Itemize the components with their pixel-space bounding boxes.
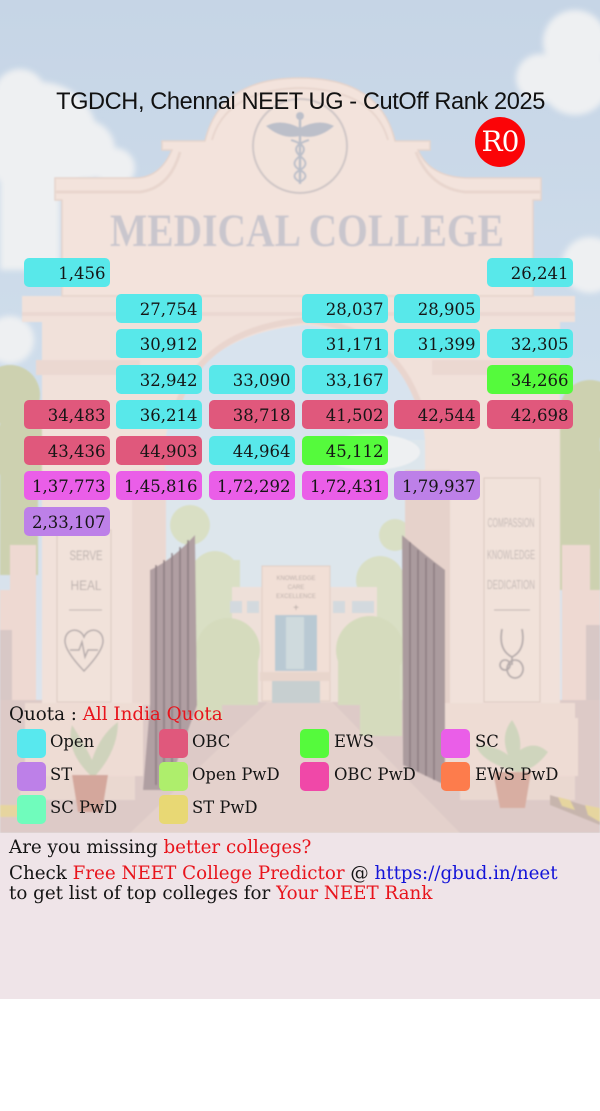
far building: KNOWLEDGE <box>276 576 316 582</box>
rank cell <box>116 400 202 429</box>
rank cell: 2,33,107 <box>32 513 106 532</box>
legend swatch: ST PwD <box>159 795 188 824</box>
rank cell: 30,912 <box>140 335 198 354</box>
rank cell: 1,37,773 <box>32 477 106 496</box>
legend swatch: EWS PwD <box>441 762 470 791</box>
legend swatch: ST <box>17 762 46 791</box>
rank cell <box>209 471 294 500</box>
rank cell <box>24 258 110 287</box>
rank cell <box>24 507 110 536</box>
near trees and bushes <box>196 616 404 736</box>
legend label: OBC: OBC <box>192 732 230 751</box>
legend swatch: OBC <box>159 729 188 758</box>
rank cell: 1,456 <box>58 264 106 283</box>
rank cell <box>487 400 572 429</box>
promo rank line: to get list of top colleges for Your NEET Rank <box>9 883 432 904</box>
rank cell: 42,698 <box>511 406 568 425</box>
left pillar panel: HEAL <box>70 577 102 593</box>
rank cell: 44,903 <box>140 442 198 461</box>
rank cell: 43,436 <box>48 442 106 461</box>
far building: EXCELLENCE <box>276 594 316 600</box>
rank cell <box>302 329 388 358</box>
rank cell <box>24 436 110 465</box>
rank cell <box>394 400 480 429</box>
rank cell <box>116 436 202 465</box>
rank cell: 1,45,816 <box>124 477 198 496</box>
rank cell <box>487 329 572 358</box>
rank cell: 1,72,431 <box>310 477 384 496</box>
rank cell <box>487 365 572 394</box>
legend label: Open: Open <box>50 732 94 751</box>
rank cell: 45,112 <box>326 442 384 461</box>
rank cell <box>24 400 110 429</box>
promo link line: Check Free NEET College Predictor @ https://gbud.in/neet <box>9 863 558 884</box>
rank cell <box>24 471 110 500</box>
legend label: EWS: EWS <box>334 732 374 751</box>
title: TGDCH, Chennai NEET UG - CutOff Rank 2025 <box>56 89 545 115</box>
right pillar panel: KNOWLEDGE <box>487 547 535 562</box>
rank cell <box>116 329 202 358</box>
rank cell <box>116 471 202 500</box>
background illustration: medical college gate <box>0 0 600 833</box>
legend label: SC: SC <box>475 732 499 751</box>
rank cell <box>116 294 202 323</box>
round badge: R0 <box>475 117 525 167</box>
rank cell <box>116 365 202 394</box>
base steps <box>20 703 578 800</box>
rank cell <box>209 365 294 394</box>
rank cell <box>302 471 388 500</box>
rank cell <box>302 294 388 323</box>
rank cell: 32,305 <box>511 335 568 354</box>
promo question: Are you missing better colleges? <box>9 837 311 858</box>
rank cell: 31,399 <box>418 335 476 354</box>
legend label: ST PwD: ST PwD <box>192 798 258 817</box>
legend swatch: SC <box>441 729 470 758</box>
potted plants <box>70 720 548 812</box>
rank cell: 28,037 <box>326 300 384 319</box>
legend swatch: OBC PwD <box>300 762 329 791</box>
legend swatch: EWS <box>300 729 329 758</box>
legend label: OBC PwD: OBC PwD <box>334 765 416 784</box>
ground <box>0 700 600 833</box>
rank cell <box>209 400 294 429</box>
rank cell: 1,79,937 <box>402 477 476 496</box>
legend swatch: SC PwD <box>17 795 46 824</box>
rank cell <box>302 400 388 429</box>
legend label: ST: ST <box>50 765 72 784</box>
rank cell: 42,544 <box>418 406 476 425</box>
rank cell <box>487 258 572 287</box>
left pillar panel <box>57 530 111 702</box>
rank cell <box>394 329 480 358</box>
rank cell: 36,214 <box>140 406 198 425</box>
legend label: SC PwD: SC PwD <box>50 798 117 817</box>
medallion caduceus <box>253 99 347 193</box>
right pillar panel: COMPASSION <box>488 515 534 530</box>
kerb stones <box>0 795 600 825</box>
opening sky <box>150 430 450 600</box>
left pillar panel: SERVE <box>70 547 102 563</box>
legend label: EWS PwD: EWS PwD <box>475 765 558 784</box>
rank cell: 28,905 <box>418 300 476 319</box>
promo panel <box>0 833 600 999</box>
right pillar panel <box>484 478 540 702</box>
rank cell <box>394 471 480 500</box>
rank cell <box>302 436 388 465</box>
rank cell <box>394 294 480 323</box>
rank cell: 38,718 <box>233 406 290 425</box>
rank cell: 34,483 <box>48 406 106 425</box>
side wings <box>0 545 600 705</box>
legend swatch: Open PwD <box>159 762 188 791</box>
far building: CARE <box>288 585 304 591</box>
rank cell: 34,266 <box>511 371 568 390</box>
far trees <box>170 505 411 700</box>
cutoff rank grid <box>24 258 573 536</box>
rank cell <box>302 365 388 394</box>
legend label: Open PwD: Open PwD <box>192 765 280 784</box>
rank cell: 33,090 <box>233 371 290 390</box>
rank cell <box>209 436 294 465</box>
rank cell: 1,72,292 <box>217 477 290 496</box>
arch structure <box>22 296 575 705</box>
rank cell: 32,942 <box>140 371 198 390</box>
legend swatch: Open <box>17 729 46 758</box>
rank cell: 33,167 <box>326 371 384 390</box>
gates <box>143 535 445 790</box>
far building <box>230 566 377 703</box>
legend <box>17 729 558 824</box>
quota line: Quota : All India Quota <box>9 704 223 725</box>
facade and pediment <box>55 78 541 296</box>
rank cell: 44,964 <box>233 442 290 461</box>
rank cell: 31,171 <box>326 335 384 354</box>
far building: + <box>293 603 299 614</box>
gate name: MEDICAL COLLEGE <box>110 205 504 257</box>
round badge: R0: R0 <box>482 125 518 158</box>
rank cell: 41,502 <box>326 406 384 425</box>
rank cell: 26,241 <box>511 264 568 283</box>
right pillar panel: DEDICATION <box>487 577 535 592</box>
rank cell: 27,754 <box>140 300 198 319</box>
